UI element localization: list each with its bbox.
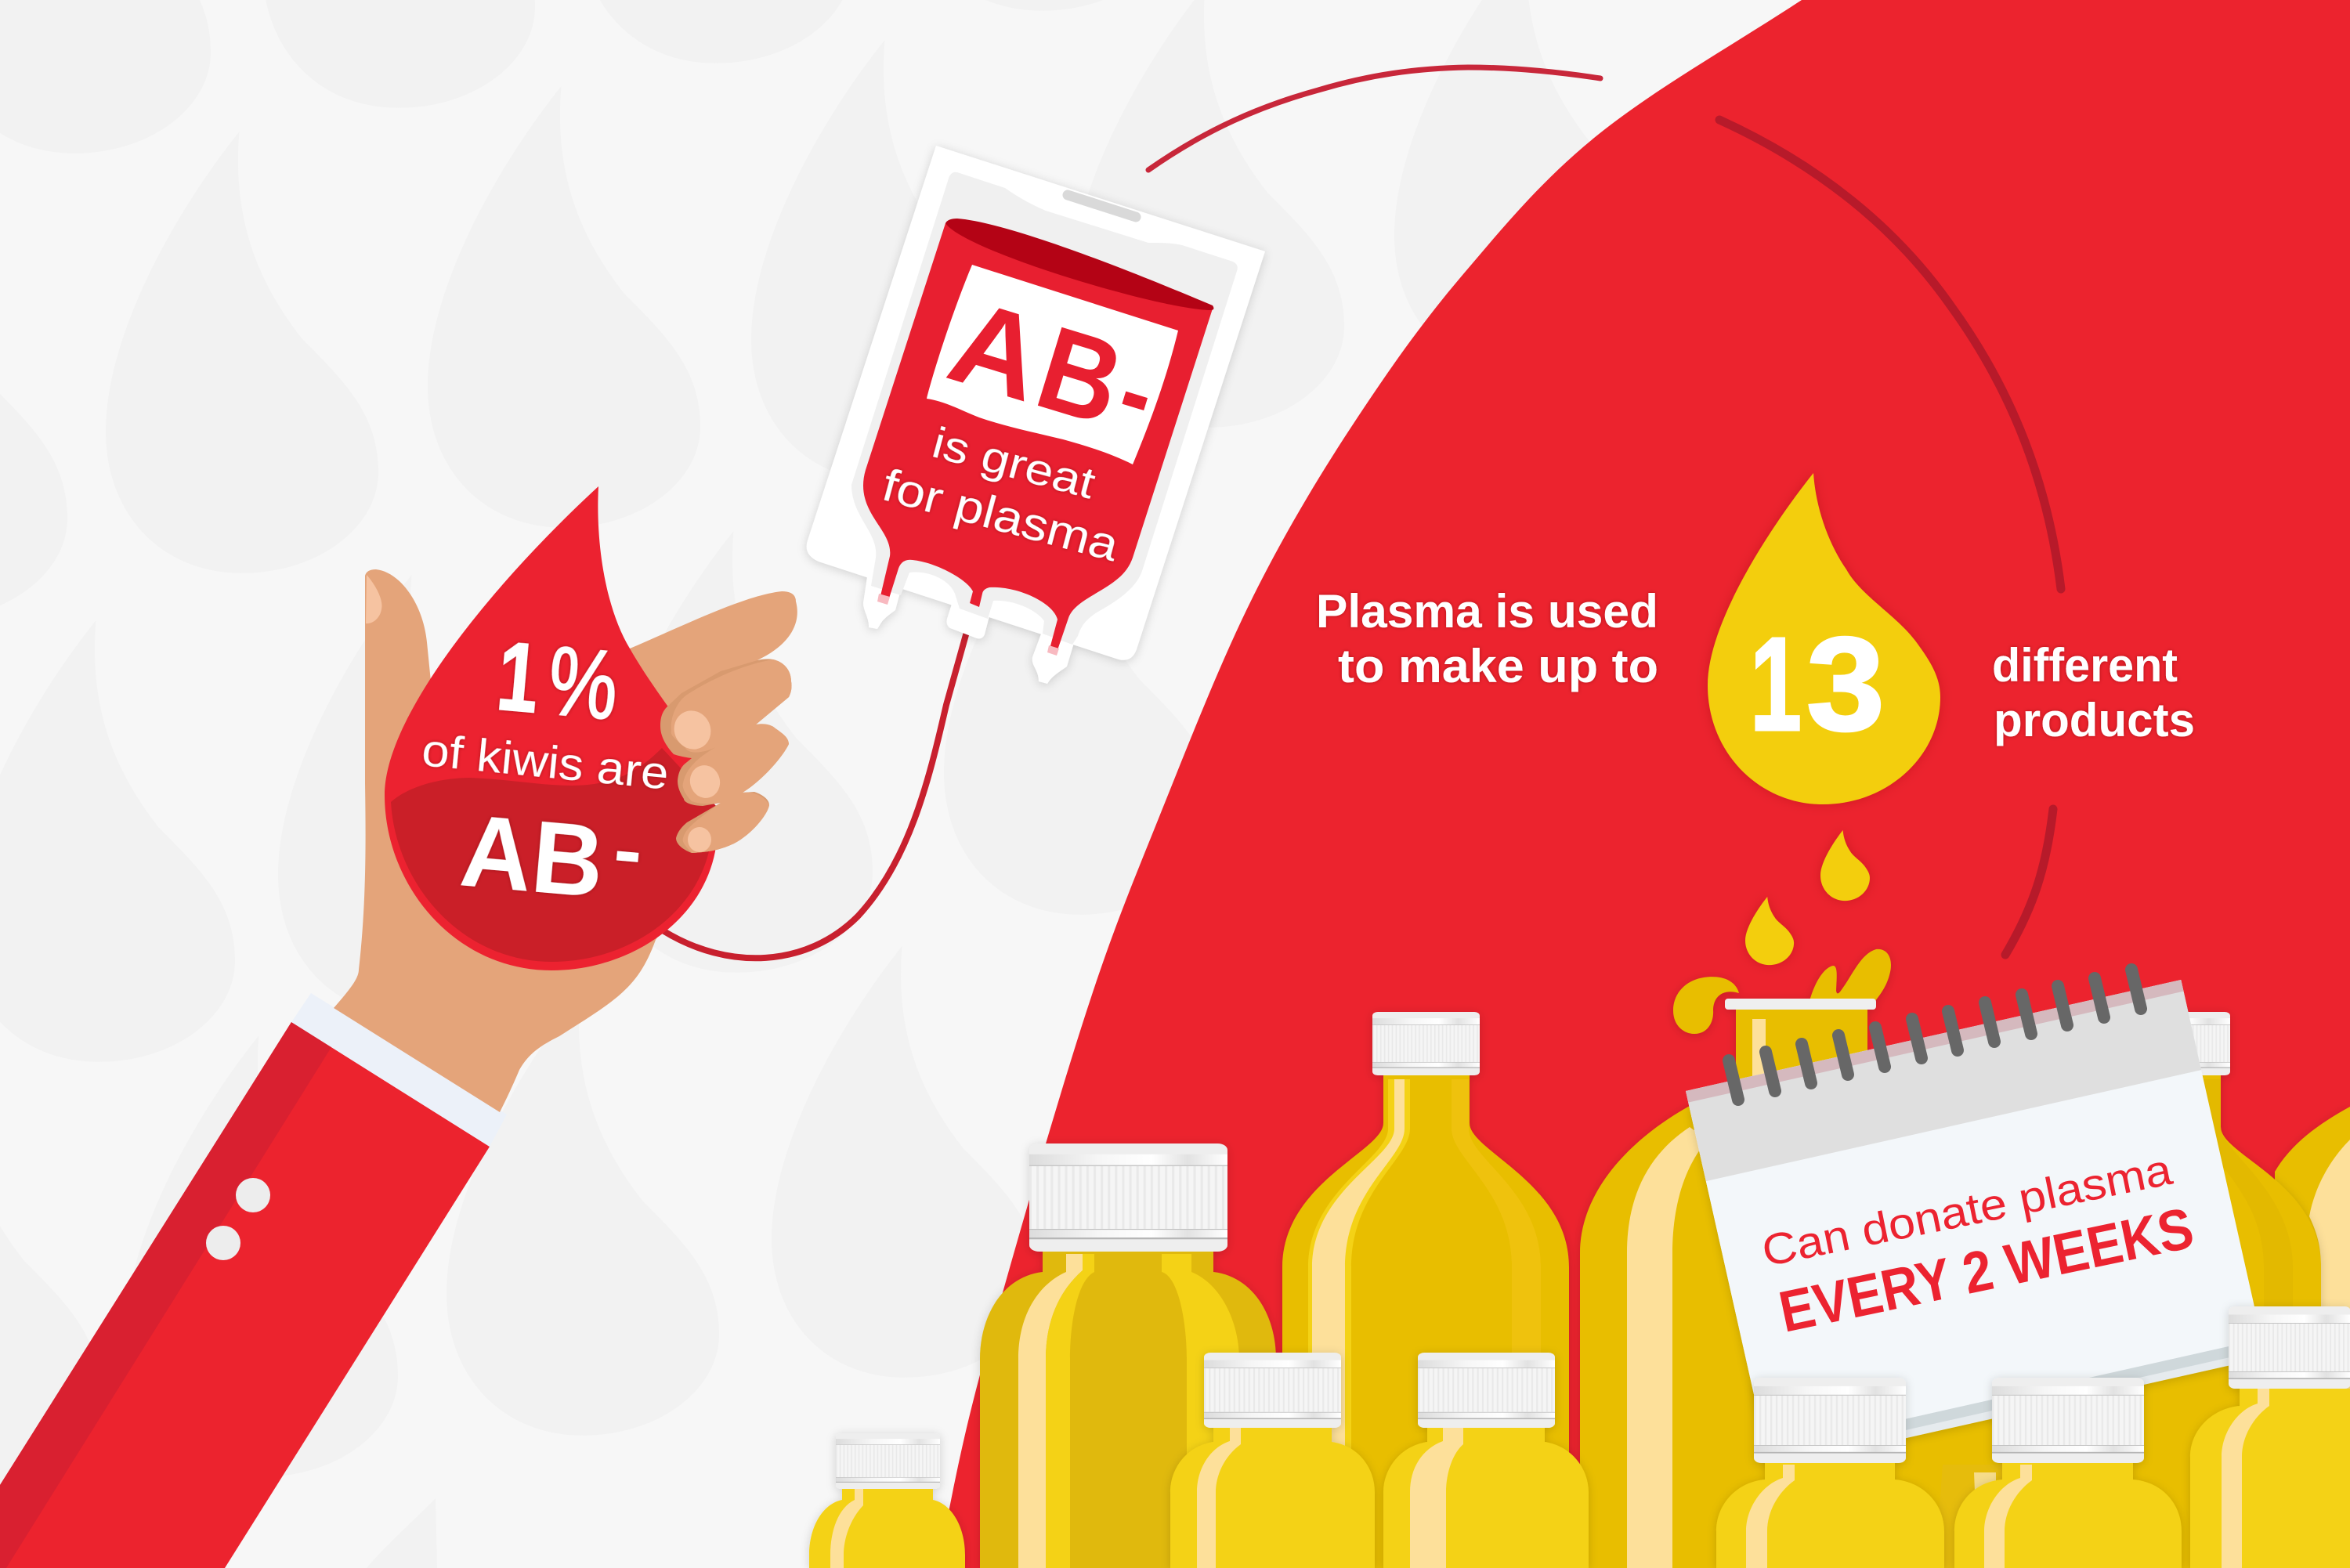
arc: right bbox=[1719, 120, 2061, 589]
bottle: front I bbox=[1716, 1378, 1944, 1568]
white label bbox=[927, 265, 1178, 464]
IV tube bbox=[663, 593, 978, 958]
bag text: is great: is great bbox=[927, 417, 1101, 508]
bottle: behind calendar bottom bbox=[1935, 1465, 2115, 1568]
splash right bbox=[1810, 949, 1891, 1001]
drop text: 1: 1 bbox=[494, 622, 543, 733]
text: plasma is used to make up to: Plasma is used bbox=[1316, 585, 1658, 638]
bottle: tall back centre bbox=[1282, 1012, 1569, 1568]
small falling drops bbox=[1745, 830, 1870, 965]
tube tips bbox=[877, 594, 1059, 656]
label text: A: A bbox=[935, 274, 1058, 427]
bottle: front J bbox=[1954, 1378, 2182, 1568]
bottle: large front left bbox=[980, 1143, 1276, 1568]
drop text: AB: AB bbox=[457, 792, 609, 919]
drop text: minus: - bbox=[610, 805, 646, 895]
red hill background bbox=[937, 0, 2350, 1568]
text: different products bbox=[1992, 639, 2195, 746]
drop text: of kiwis are: of kiwis are bbox=[420, 724, 671, 800]
finger fill bbox=[671, 659, 792, 853]
bottle: back tall centre-right with splash bbox=[1580, 949, 2023, 1568]
shirt cuff bbox=[291, 993, 507, 1147]
fingers bbox=[660, 659, 792, 853]
highlight bbox=[2222, 1389, 2269, 1568]
far right highlight bbox=[2309, 1140, 2350, 1568]
drop body bbox=[385, 486, 716, 970]
highlight bbox=[1197, 1428, 1241, 1568]
yellow band bbox=[1046, 1254, 1094, 1568]
sleeve bbox=[0, 1022, 490, 1568]
arc: top bbox=[1148, 67, 1600, 170]
cap bbox=[1992, 1378, 2144, 1463]
header band bbox=[1686, 980, 2201, 1181]
label text: B: B bbox=[1023, 301, 1137, 451]
main page bbox=[1686, 980, 2261, 1451]
right band bbox=[1162, 1254, 1239, 1568]
splash left bbox=[1673, 977, 1739, 1034]
text: plasma is used to make up to bbox=[1316, 585, 1658, 692]
bottle: front K bbox=[2190, 1306, 2350, 1568]
yellow drop with 13 bbox=[1708, 473, 1940, 804]
bottle: front H bbox=[1383, 1353, 1589, 1568]
sleeve shade bbox=[0, 1022, 331, 1568]
drop text: percent: % bbox=[544, 627, 622, 741]
cap bbox=[1029, 1143, 1227, 1252]
arc: lower right bbox=[2005, 809, 2053, 955]
cream highlight bbox=[1018, 1254, 1083, 1568]
bag text: for plasma: for plasma bbox=[877, 460, 1125, 572]
sleeve and arm bbox=[0, 993, 507, 1568]
bottle: small far left bbox=[809, 1433, 965, 1568]
cuff buttons bbox=[236, 1178, 270, 1212]
label text: minus: - bbox=[1105, 329, 1170, 455]
background drop pattern bbox=[0, 0, 1667, 1568]
cap bbox=[2123, 1012, 2230, 1075]
number 3: 3 bbox=[1806, 610, 1885, 759]
back sheet bbox=[1689, 997, 2258, 1469]
cream highlight bbox=[1312, 1079, 1405, 1568]
calendar bbox=[1686, 970, 2266, 1469]
cap bbox=[836, 1433, 940, 1489]
highlight bbox=[1410, 1428, 1463, 1568]
cream highlight bbox=[1627, 1127, 1708, 1568]
blood surface bbox=[945, 219, 1213, 310]
cap bbox=[1754, 1378, 1906, 1463]
text: plasma is used to make up to: to make up to bbox=[1338, 640, 1658, 692]
bag card bbox=[807, 146, 1265, 684]
calendar text: every 2 weeks: EVERY 2 WEEKS bbox=[1773, 1195, 2199, 1345]
inner seam bbox=[851, 172, 1238, 645]
cap bbox=[1372, 1012, 1480, 1075]
band bbox=[2203, 1079, 2293, 1568]
highlight bbox=[1746, 1465, 1795, 1568]
rim bbox=[1725, 999, 1876, 1010]
text: different products: different bbox=[1992, 639, 2178, 692]
highlight bbox=[1984, 1465, 2032, 1568]
drop dark fill bbox=[391, 748, 717, 962]
text: different products: products bbox=[1994, 694, 2195, 746]
finger shadow bbox=[660, 659, 792, 853]
highlight bbox=[830, 1489, 863, 1568]
blood bag bbox=[807, 146, 1265, 684]
calendar text: can donate plasma: Can donate plasma bbox=[1758, 1144, 2177, 1276]
hand bbox=[334, 569, 797, 1112]
cap bbox=[1204, 1353, 1341, 1428]
pink binding strip bbox=[1686, 980, 2184, 1103]
neck highlight bbox=[1752, 1019, 1766, 1082]
cap bbox=[2229, 1306, 2350, 1389]
number 1: 1 bbox=[1750, 610, 1802, 759]
cap bbox=[1418, 1353, 1555, 1428]
yellow edge bbox=[1308, 1079, 1410, 1568]
spiral rings bbox=[1729, 970, 2141, 1100]
thumb nail bbox=[366, 575, 381, 623]
blood drop held in hand bbox=[385, 486, 717, 970]
hanging slot bbox=[1068, 195, 1136, 217]
right band bbox=[1452, 1079, 1541, 1568]
blood fill bbox=[863, 223, 1213, 653]
bottle: back right bbox=[2034, 1012, 2321, 1568]
bottle: far right back bbox=[2275, 1107, 2350, 1568]
body bbox=[1580, 1010, 2023, 1568]
bottle: front G bbox=[1170, 1353, 1375, 1568]
fingernails bbox=[668, 705, 724, 852]
shadow sheet bbox=[1687, 988, 2259, 1461]
